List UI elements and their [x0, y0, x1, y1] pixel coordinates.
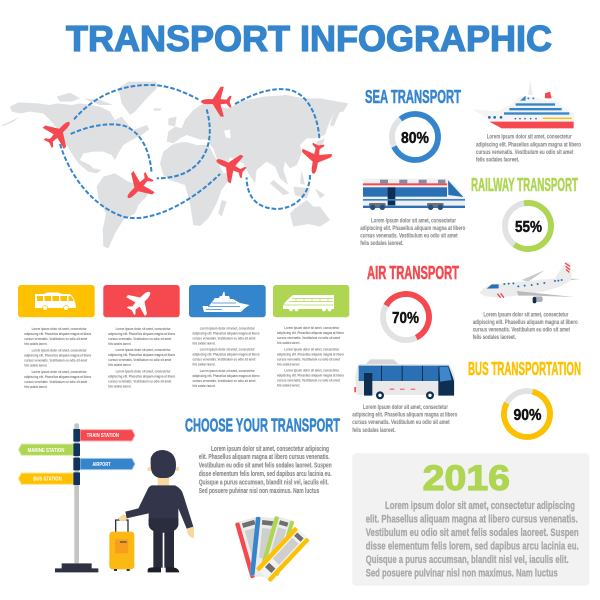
donut chart: 80% [383, 105, 447, 169]
illustration: traveller scene [18, 423, 310, 582]
donut chart: 55%: 55% [515, 219, 542, 236]
map: red airplanes [37, 87, 333, 208]
icon: airliner [480, 262, 581, 303]
text column 4: felis sodales laoreet. [277, 340, 300, 345]
text column 3 [192, 325, 260, 388]
donut chart: 70%: 70% [392, 310, 419, 327]
text column 4 [277, 325, 344, 388]
icon: coach bus [354, 359, 455, 399]
title: TRANSPORT INFOGRAPHIC [66, 18, 552, 59]
tab: sea [189, 285, 266, 317]
icon: white plane [121, 283, 159, 321]
text column 2: adipiscing elit. Phasellus aliquam magna at libero [108, 373, 176, 378]
text column 1: adipiscing elit. Phasellus aliquam magna at libero [24, 353, 92, 358]
donut chart: 55% [501, 199, 555, 253]
signpost [18, 423, 135, 572]
text column 2 [108, 326, 176, 388]
text block: air [473, 312, 578, 341]
ticket: yellow [256, 527, 310, 582]
signpost: MARINE STATION [28, 448, 64, 454]
text column 4: adipiscing elit. Phasellus aliquam magna at libero [277, 373, 344, 378]
heading: air transport: AIR TRANSPORT [367, 263, 459, 283]
text column 2: felis sodales laoreet. [108, 341, 131, 346]
icon: white train [283, 295, 334, 311]
text block: railway: felis sodales laoreet. [360, 241, 404, 247]
signpost: AIRPORT [92, 462, 111, 468]
text column 4: cursus venenatis. Vestibulum eu odio sit amet [277, 356, 340, 361]
text column 4: Lorem Ipsum dolor sit amet, consectetur [284, 368, 340, 373]
panel: transport type tabs [18, 283, 349, 321]
heading: sea transport: SEA TRANSPORT [365, 87, 461, 107]
text column 3: cursus venenatis. Vestibulum eu odio sit amet [192, 378, 256, 383]
text block: choose your transport: Quisque a purus accumsan, blandit nisl vel, iaculis elit. [199, 478, 329, 486]
text block: choose your transport: Sed posuere pulvinar nisl non maximus. Nam luctus [199, 486, 319, 495]
signpost: BUS STATION [33, 477, 62, 483]
text column 4: adipiscing elit. Phasellus aliquam magna at libero [277, 351, 344, 356]
text column 4: Lorem Ipsum dolor sit amet, consectetur [284, 325, 340, 330]
text column 1: adipiscing elit. Phasellus aliquam magna at libero [24, 374, 92, 379]
text block: air: felis sodales laoreet. [473, 335, 516, 341]
text block: choose your transport [199, 444, 332, 495]
signpost: TRAIN STATION [87, 433, 119, 439]
text column 2: felis sodales laoreet. [108, 383, 131, 388]
text block: 2016 [366, 500, 579, 579]
text column 2: cursus venenatis. Vestibulum eu odio sit amet [108, 378, 172, 383]
person seen from behind [118, 450, 194, 572]
text block: choose your transport: Lorem ipsum dolor sit amet, consectetur adipiscing [211, 444, 329, 453]
panel: tab descriptions [24, 325, 344, 389]
map: dashed routes [60, 85, 319, 218]
text column 3: felis sodales laoreet. [192, 362, 216, 367]
heading: 2016: 2016 [423, 459, 510, 498]
text column 1: cursus venenatis. Vestibulum eu odio sit amet [24, 336, 88, 341]
panel: 2016 [352, 453, 589, 586]
text column 3: adipiscing elit. Phasellus aliquam magna at libero [192, 373, 260, 378]
text block: choose your transport: elit. Phasellus aliquam magna at libero cursus venenatis. [199, 452, 330, 461]
text column 2: felis sodales laoreet. [108, 362, 131, 367]
text block: railway: adipiscing elit. Phasellus aliquam magna at libero [360, 226, 466, 232]
text column 1: cursus venenatis. Vestibulum eu odio sit amet [24, 379, 88, 384]
panel: air transport [367, 262, 581, 348]
tab: bus [18, 285, 95, 317]
world map with flight routes [2, 82, 348, 248]
panel: sea transport [365, 80, 581, 169]
text column 2: cursus venenatis. Vestibulum eu odio sit amet [108, 336, 172, 341]
text column 2: Lorem Ipsum dolor sit amet, consectetur [116, 347, 171, 352]
text column 2: adipiscing elit. Phasellus aliquam magna at libero [108, 331, 176, 336]
text block: bus [352, 405, 458, 434]
text column 1: adipiscing elit. Phasellus aliquam magna at libero [24, 331, 92, 336]
heading: choose your transport: CHOOSE YOUR TRANSPORT [185, 416, 340, 436]
text column 3: adipiscing elit. Phasellus aliquam magna at libero [192, 352, 260, 357]
text block: choose your transport: disse elementum felis lorem, sed dapibus arcu lacinia eu. [199, 469, 332, 478]
text column 4: Lorem Ipsum dolor sit amet, consectetur [284, 346, 340, 351]
text column 1: cursus venenatis. Vestibulum eu odio sit amet [24, 358, 88, 363]
text column 4: adipiscing elit. Phasellus aliquam magna at libero [277, 330, 344, 335]
text block: sea: Lorem Ipsum dolor sit amet, consectetur [487, 135, 572, 141]
ticket: red [235, 517, 272, 578]
text column 2: Lorem Ipsum dolor sit amet, consectetur [116, 326, 171, 331]
text column 3: felis sodales laoreet. [192, 383, 216, 388]
text column 1: felis sodales laoreet. [24, 363, 47, 368]
text column 4: cursus venenatis. Vestibulum eu odio sit amet [277, 378, 340, 383]
panel: bus transportation [352, 359, 581, 442]
text column 1: felis sodales laoreet. [24, 384, 47, 389]
ticket: green [259, 516, 294, 576]
text block: bus: cursus venenatis. Vestibulum eu odio sit amet [352, 420, 450, 426]
text column 4: felis sodales laoreet. [277, 361, 300, 366]
text column 2: adipiscing elit. Phasellus aliquam magna at libero [108, 352, 176, 357]
text block: railway: cursus venenatis. Vestibulum eu odio sit amet [360, 234, 458, 240]
text column 3: Lorem Ipsum dolor sit amet, consectetur [200, 347, 255, 352]
donut chart: 90% [499, 386, 555, 442]
donut chart: 90%: 90% [514, 407, 542, 424]
text column 1: Lorem Ipsum dolor sit amet, consectetur [32, 326, 87, 331]
text column 3: cursus venenatis. Vestibulum eu odio sit amet [192, 335, 256, 340]
text block: bus: felis sodales laoreet. [352, 428, 396, 434]
map: inland seas [182, 129, 231, 143]
tab: railway [273, 285, 349, 317]
text column 2: cursus venenatis. Vestibulum eu odio sit amet [108, 357, 172, 362]
icon: train [363, 179, 465, 210]
text column 1 [24, 326, 92, 389]
text block: sea [476, 135, 581, 164]
text block: railway [360, 218, 466, 247]
text column 4: cursus venenatis. Vestibulum eu odio sit amet [277, 335, 340, 340]
text column 3: adipiscing elit. Phasellus aliquam magna at libero [192, 330, 260, 335]
text column 1: Lorem Ipsum dolor sit amet, consectetur [32, 369, 87, 374]
panel: railway transport [360, 175, 578, 253]
icon: cruise ship [473, 80, 574, 128]
suitcase [109, 520, 134, 571]
text column 3: felis sodales laoreet. [192, 340, 216, 345]
text column 4: felis sodales laoreet. [277, 383, 300, 388]
text column 3: Lorem Ipsum dolor sit amet, consectetur [200, 368, 255, 373]
icon: white bus [35, 292, 76, 310]
text block: sea: felis sodales laoreet. [476, 157, 520, 163]
text block: bus: Lorem Ipsum dolor sit amet, consectetur [363, 405, 448, 411]
donut chart: 80%: 80% [401, 130, 429, 147]
text block: railway: Lorem Ipsum dolor sit amet, consectetur [371, 218, 456, 224]
text column 3: Lorem Ipsum dolor sit amet, consectetur [200, 325, 255, 330]
text column 1: felis sodales laoreet. [24, 341, 47, 346]
donut chart: 70% [375, 286, 437, 348]
map: continents [2, 82, 348, 248]
text block: choose your transport: Vestibulum eu odio sit amet felis sodales laoreet. Suspen [199, 460, 332, 470]
tickets [235, 516, 310, 582]
ticket: blue [250, 517, 276, 577]
tab: air [103, 283, 180, 321]
text column 1: Lorem Ipsum dolor sit amet, consectetur [32, 348, 87, 353]
text column 3: cursus venenatis. Vestibulum eu odio sit amet [192, 357, 256, 362]
text block: air: Lorem Ipsum dolor sit amet, consectetur [483, 312, 569, 318]
icon: white ship [202, 292, 250, 312]
text block: bus: adipiscing elit. Phasellus aliquam magna at libero [352, 413, 458, 419]
text column 2: Lorem Ipsum dolor sit amet, consectetur [116, 368, 171, 373]
